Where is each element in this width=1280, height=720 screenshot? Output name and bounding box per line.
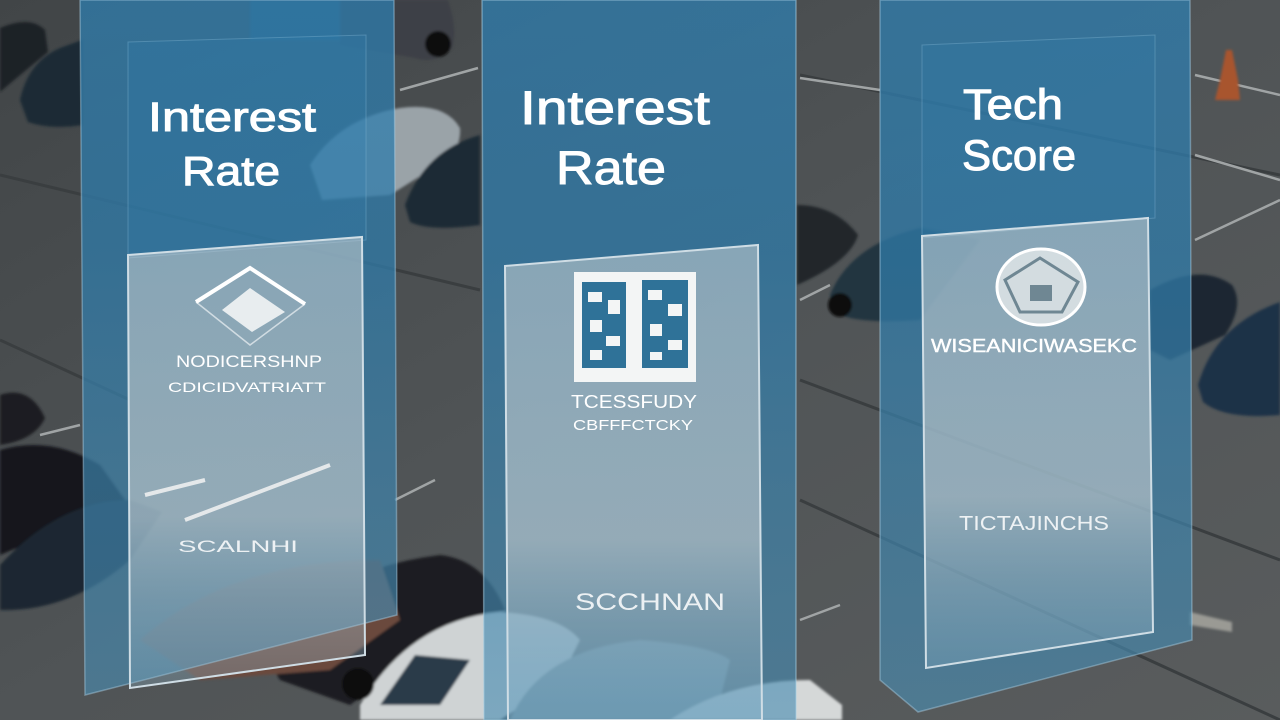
panel 3 inner frame [922,35,1155,238]
panel 1 heading [148,94,317,194]
panel: interest rate center [482,0,796,720]
panel 3 card footer text: TICTAJINCHS [959,513,1109,535]
panel 1 heading: Rate [182,148,280,194]
icon: hexagon emblem [997,249,1085,325]
icon: qr pattern [574,272,696,382]
panel 3 blue backing [880,0,1192,712]
panel 1 blue backing [80,0,397,695]
panel 2 card caption: CBFFFCTCKY [573,417,693,434]
icon: diamond badge [196,268,305,345]
panel: interest rate left [80,0,397,695]
panel 2 card caption: TCESSFUDY [571,392,697,412]
panel 1 heading: Interest [148,94,317,140]
panel 2 heading [520,81,710,194]
panel 1 glass card [128,237,365,688]
panel 3 heading: Tech [963,81,1063,129]
panel 2 card caption [571,392,697,434]
panel 3 card caption: WISEANICIWASEKC [931,336,1137,356]
panel 1 card caption: CDICIDVATRIATT [168,379,327,395]
panel 2 heading: Rate [556,141,666,194]
panel 3 heading [962,81,1076,180]
panel 1 card caption [168,352,327,395]
panel 1 card footer text: SCALNHI [178,537,298,556]
panel 2 card footer text: SCCHNAN [575,589,725,616]
panel 3 glass card [922,218,1153,668]
panel 3 heading: Score [962,132,1076,180]
panel 1 inner frame [128,35,366,258]
panel 2 heading: Interest [520,81,710,134]
panel 2 glass card [505,245,762,720]
panel 2 blue backing [482,0,796,720]
panel: tech score right [880,0,1192,712]
panel 1 card caption: NODICERSHNP [176,352,322,371]
